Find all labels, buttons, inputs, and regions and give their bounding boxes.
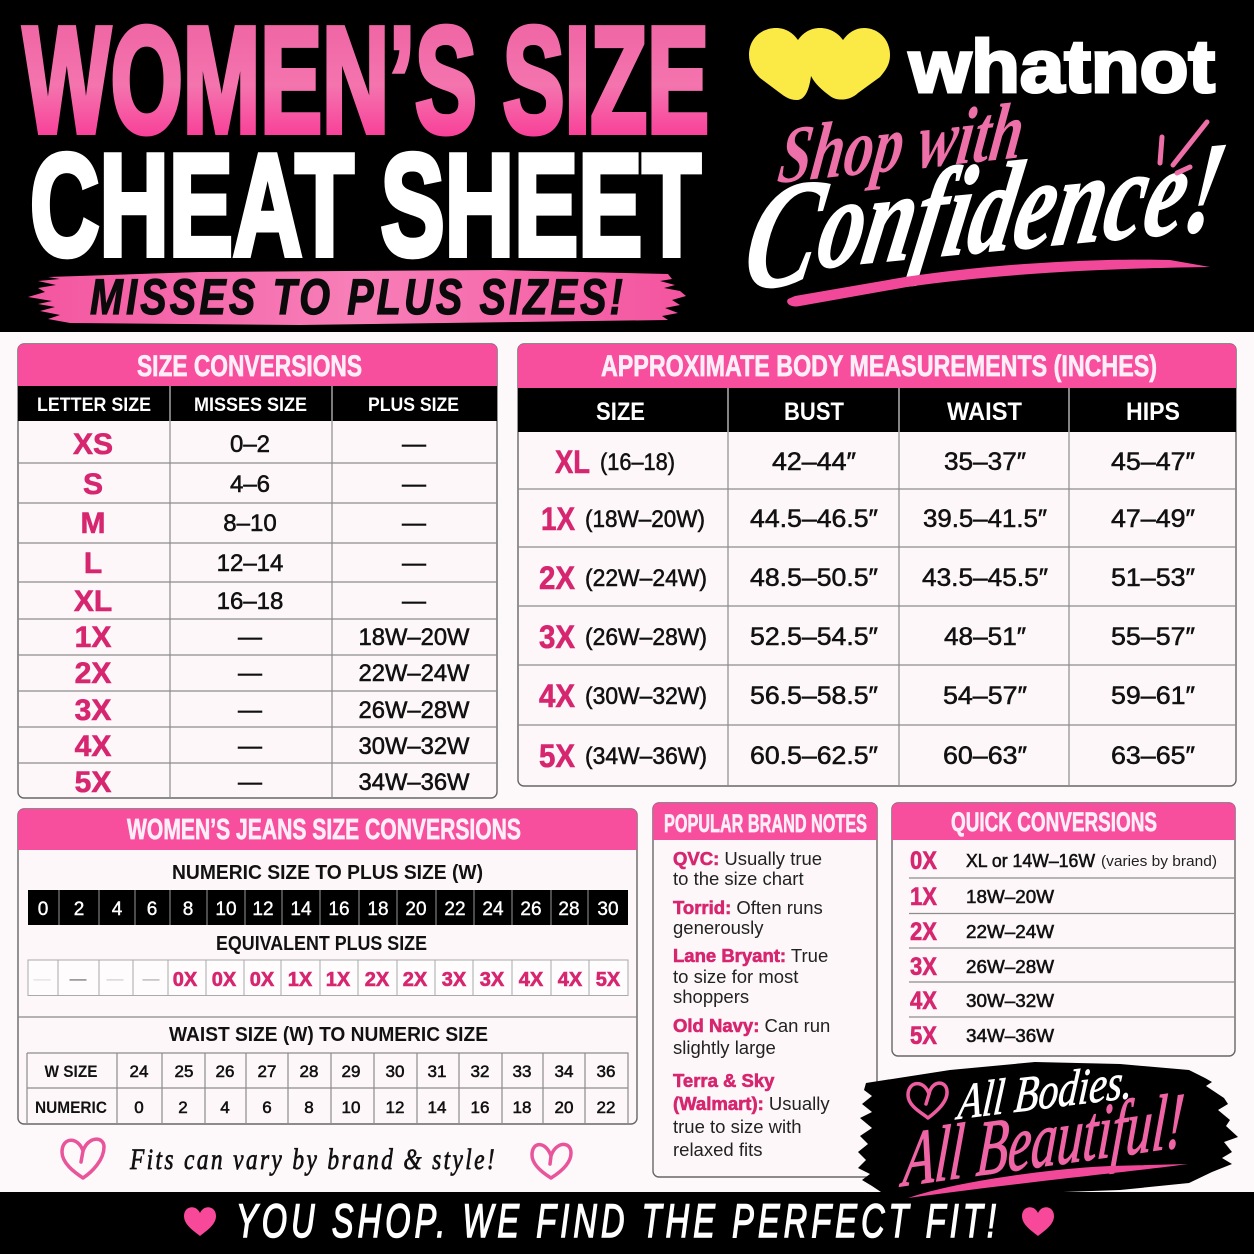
equivalent plus size strip: 3X	[442, 969, 467, 991]
hips values	[1111, 448, 1195, 770]
conversion rows: 4X	[910, 987, 937, 1015]
size labels: 4X	[539, 678, 576, 714]
column headers	[596, 398, 1180, 426]
waist to numeric table: 6	[262, 1098, 272, 1117]
brand: qvc: QVC: Usually true	[673, 848, 822, 869]
waist to numeric table: 33	[513, 1062, 531, 1081]
equivalent plus size strip: 1X	[288, 969, 313, 991]
panel: body measurements	[518, 344, 1236, 786]
hips values: 51–53″	[1111, 564, 1195, 592]
conversion rows: 18W–20W	[966, 887, 1054, 907]
title: women's size: WOMEN’S SIZE	[23, 0, 709, 164]
callout: all bodies all beautiful: All Bodies.	[953, 1052, 1135, 1130]
equivalent plus size strip: 0X	[173, 969, 198, 991]
equivalent plus size strip: 2X	[365, 969, 390, 991]
letter sizes: 3X	[75, 694, 111, 727]
waist to numeric table: 27	[258, 1062, 276, 1081]
brand: old navy: slightly large	[673, 1037, 776, 1058]
equivalent plus size strip: —	[142, 969, 160, 988]
misses sizes: 8–10	[223, 510, 277, 537]
waist to numeric table	[27, 1053, 628, 1124]
size labels: 2X	[539, 560, 576, 596]
waist to numeric table: 18	[513, 1098, 531, 1117]
conversion rows: 26W–28W	[966, 957, 1054, 977]
slogan: shop with confidence: onfidence!	[808, 116, 1236, 297]
size labels: (34W–36W)	[585, 743, 707, 770]
letter sizes: S	[83, 468, 103, 501]
bust values: 48.5–50.5″	[750, 564, 878, 592]
column headers: MISSES SIZE	[194, 395, 307, 416]
waist to numeric table: 36	[597, 1062, 615, 1081]
panel: quick conversions	[892, 803, 1235, 1056]
waist to numeric table: 0	[134, 1098, 144, 1117]
numeric size strip: 4	[112, 899, 123, 920]
size labels: (22W–24W)	[585, 565, 707, 592]
waist to numeric table: 32	[471, 1062, 489, 1081]
plus sizes: —	[402, 588, 426, 615]
waist to numeric table: 16	[471, 1098, 489, 1117]
waist to numeric table: 20	[555, 1098, 573, 1117]
waist to numeric table: 2	[178, 1098, 188, 1117]
letter sizes: 5X	[75, 766, 111, 799]
numeric size strip: 16	[328, 899, 350, 920]
waist to numeric table: 30	[386, 1062, 404, 1081]
plus sizes: 18W–20W	[358, 624, 470, 651]
heading: QUICK CONVERSIONS	[951, 807, 1157, 837]
whatnot logo	[749, 25, 1215, 108]
column headers: LETTER SIZE	[37, 395, 151, 416]
waist to numeric table: 28	[300, 1062, 318, 1081]
subheading: equivalent: EQUIVALENT PLUS SIZE	[216, 933, 427, 955]
plus sizes: 34W–36W	[358, 769, 470, 796]
letter sizes: 4X	[75, 730, 111, 763]
size labels: (16–18)	[600, 449, 675, 476]
size labels: (30W–32W)	[585, 683, 707, 710]
waist to numeric table: 10	[342, 1098, 360, 1117]
misses sizes: 4–6	[230, 471, 270, 498]
size labels: 3X	[539, 619, 576, 655]
conversion rows: 34W–36W	[966, 1026, 1054, 1046]
numeric size strip: 14	[290, 899, 312, 920]
waist values: 48–51″	[944, 623, 1026, 651]
hips values: 63–65″	[1111, 742, 1195, 770]
subheading: waist: WAIST SIZE (W) TO NUMERIC SIZE	[169, 1024, 488, 1046]
waist to numeric table: 8	[304, 1098, 314, 1117]
waist values: 54–57″	[943, 682, 1027, 710]
brand: lane bryant: to size for most	[673, 966, 798, 987]
equivalent plus size strip	[28, 960, 628, 996]
waist to numeric table: NUMERIC	[35, 1098, 107, 1117]
hips values: 55–57″	[1111, 623, 1195, 651]
column headers: PLUS SIZE	[368, 395, 459, 416]
heading: SIZE CONVERSIONS	[137, 350, 362, 383]
waist values: 43.5–45.5″	[922, 564, 1048, 592]
numeric size strip: 28	[558, 899, 580, 920]
brand: terra and sky: true to size with	[673, 1116, 802, 1137]
numeric size strip: 12	[252, 899, 274, 920]
column headers: BUST	[784, 398, 844, 426]
letter sizes: L	[84, 547, 102, 580]
brand: terra and sky: (Walmart):	[673, 1093, 764, 1114]
footer band	[0, 1192, 1254, 1254]
plus sizes: —	[402, 510, 426, 537]
waist to numeric table: 12	[386, 1098, 404, 1117]
misses sizes: 0–2	[230, 431, 270, 458]
waist values	[922, 448, 1048, 770]
equivalent plus size strip: —	[34, 969, 50, 988]
plus sizes	[358, 431, 470, 796]
brand: terra and sky: Terra & Sky	[673, 1070, 775, 1091]
equivalent plus size strip: 4X	[558, 969, 583, 991]
brand: lane bryant: shoppers	[673, 986, 749, 1007]
icon: heart left	[62, 1139, 104, 1178]
misses sizes: —	[238, 697, 262, 724]
bust values	[750, 448, 878, 770]
conversion rows: 30W–32W	[966, 991, 1054, 1011]
waist values: 39.5–41.5″	[923, 505, 1047, 533]
waist to numeric table: 24	[130, 1062, 148, 1081]
numeric size strip: 20	[405, 899, 427, 920]
whatnot logo: whatnot	[908, 25, 1215, 108]
bust values: 52.5–54.5″	[750, 623, 878, 651]
plus sizes: —	[402, 550, 426, 577]
header band	[0, 0, 1254, 332]
slogan: shop with confidence: Shop with	[773, 85, 1030, 201]
size labels: 1X	[541, 501, 576, 537]
icon: heart right	[532, 1144, 571, 1178]
panel: brand notes	[653, 803, 877, 1177]
waist to numeric table: 26	[216, 1062, 234, 1081]
waist to numeric table: 29	[342, 1062, 360, 1081]
plus sizes: —	[402, 431, 426, 458]
conversion rows: XL or 14W–16W	[966, 851, 1095, 871]
conversion rows: 22W–24W	[966, 922, 1054, 942]
equivalent plus size strip: 3X	[480, 969, 505, 991]
waist to numeric table: 34	[555, 1062, 573, 1081]
waist to numeric table: 25	[175, 1062, 193, 1081]
size labels: XL	[555, 444, 590, 480]
misses sizes: —	[238, 624, 262, 651]
plus sizes: 30W–32W	[358, 733, 470, 760]
brand: torrid: Torrid: Often runs	[673, 897, 823, 918]
numeric size strip: 22	[444, 899, 466, 920]
misses sizes: —	[238, 733, 262, 760]
letter sizes: XS	[73, 428, 113, 461]
letter sizes: 1X	[75, 621, 111, 654]
conversion rows: 1X	[910, 883, 937, 911]
plus sizes: —	[402, 471, 426, 498]
brand: torrid: generously	[673, 917, 764, 938]
bust values: 60.5–62.5″	[750, 742, 878, 770]
hips values: 45–47″	[1111, 448, 1195, 476]
conversion rows: (varies by brand)	[1101, 853, 1217, 870]
letter sizes: XL	[74, 585, 112, 618]
waist to numeric table: 14	[428, 1098, 446, 1117]
numeric size strip	[28, 890, 628, 925]
subheading: numeric: NUMERIC SIZE TO PLUS SIZE (W)	[172, 862, 483, 884]
size labels: 5X	[539, 738, 576, 774]
numeric size strip: 10	[215, 899, 237, 920]
letter sizes: M	[80, 507, 106, 540]
equivalent plus size strip: —	[70, 969, 86, 988]
brand: terra and sky: Usually	[769, 1093, 830, 1114]
brand: old navy: Old Navy: Can run	[673, 1015, 830, 1036]
slogan: shop with confidence	[733, 85, 1238, 324]
waist to numeric table: 31	[428, 1062, 446, 1081]
numeric size strip: 2	[74, 899, 84, 920]
numeric size strip: 0	[38, 899, 48, 920]
plus sizes: 26W–28W	[358, 697, 470, 724]
equivalent plus size strip: 4X	[519, 969, 544, 991]
slogan: shop with confidence: C	[733, 146, 837, 324]
numeric size strip: 6	[147, 899, 157, 920]
conversion rows	[910, 847, 1217, 1050]
column headers: SIZE	[596, 398, 645, 426]
panel: jeans size conversions	[18, 809, 637, 1124]
bust values: 44.5–46.5″	[750, 505, 878, 533]
heading: POPULAR BRAND NOTES	[664, 810, 867, 838]
waist to numeric table: 4	[220, 1098, 230, 1117]
numeric size strip: 18	[367, 899, 389, 920]
conversion rows: 3X	[910, 953, 937, 981]
bust values: 56.5–58.5″	[750, 682, 878, 710]
equivalent plus size strip: 0X	[250, 969, 275, 991]
letter sizes	[73, 428, 113, 799]
brand: terra and sky: relaxed fits	[673, 1139, 762, 1160]
equivalent plus size strip: —	[106, 969, 124, 988]
conversion rows: 0X	[910, 847, 937, 875]
equivalent plus size strip: 0X	[212, 969, 237, 991]
misses sizes: 12–14	[217, 550, 283, 577]
waist to numeric table: W SIZE	[44, 1062, 98, 1081]
heading: WOMEN’S JEANS SIZE CONVERSIONS	[127, 814, 521, 846]
waist values: 35–37″	[944, 448, 1026, 476]
column headers: HIPS	[1126, 398, 1180, 426]
letter sizes: 2X	[75, 657, 111, 690]
hips values: 47–49″	[1111, 505, 1195, 533]
size labels: (26W–28W)	[585, 624, 707, 651]
column headers	[37, 395, 459, 416]
misses sizes: 16–18	[217, 588, 283, 615]
numeric size strip: 24	[482, 899, 504, 920]
note: fits vary: Fits can vary by brand & style!	[129, 1143, 497, 1176]
waist to numeric table: 22	[597, 1098, 615, 1117]
brand: lane bryant: Lane Bryant: True	[673, 945, 828, 966]
equivalent plus size strip: 5X	[596, 969, 621, 991]
callout: all bodies all beautiful	[858, 1052, 1238, 1204]
plus sizes: 22W–24W	[358, 660, 470, 687]
numeric size strip: 30	[597, 899, 619, 920]
misses sizes: —	[238, 769, 262, 796]
bust values: 42–44″	[772, 448, 856, 476]
icon: footer heart right	[1022, 1207, 1054, 1236]
icon: outlined heart	[908, 1083, 947, 1118]
equivalent plus size strip: 1X	[326, 969, 351, 991]
callout: all bodies all beautiful: All Beautiful!	[898, 1076, 1187, 1204]
icon: footer heart left	[184, 1207, 216, 1236]
waist values: 60–63″	[943, 742, 1027, 770]
size labels	[539, 444, 707, 774]
title: cheat sheet: CHEAT SHEET	[30, 124, 701, 286]
brand: qvc: to the size chart	[673, 868, 804, 889]
equivalent plus size strip: 2X	[403, 969, 428, 991]
column headers: WAIST	[947, 398, 1022, 426]
hips values: 59–61″	[1111, 682, 1195, 710]
subtitle brush banner: MISSES TO PLUS SIZES!	[90, 269, 626, 325]
size labels: (18W–20W)	[585, 506, 705, 533]
conversion rows: 5X	[910, 1022, 937, 1050]
misses sizes	[217, 431, 283, 796]
conversion rows: 2X	[910, 918, 937, 946]
panel: size conversions	[18, 344, 497, 799]
misses sizes: —	[238, 660, 262, 687]
numeric size strip: 26	[520, 899, 542, 920]
numeric size strip: 8	[183, 899, 193, 920]
